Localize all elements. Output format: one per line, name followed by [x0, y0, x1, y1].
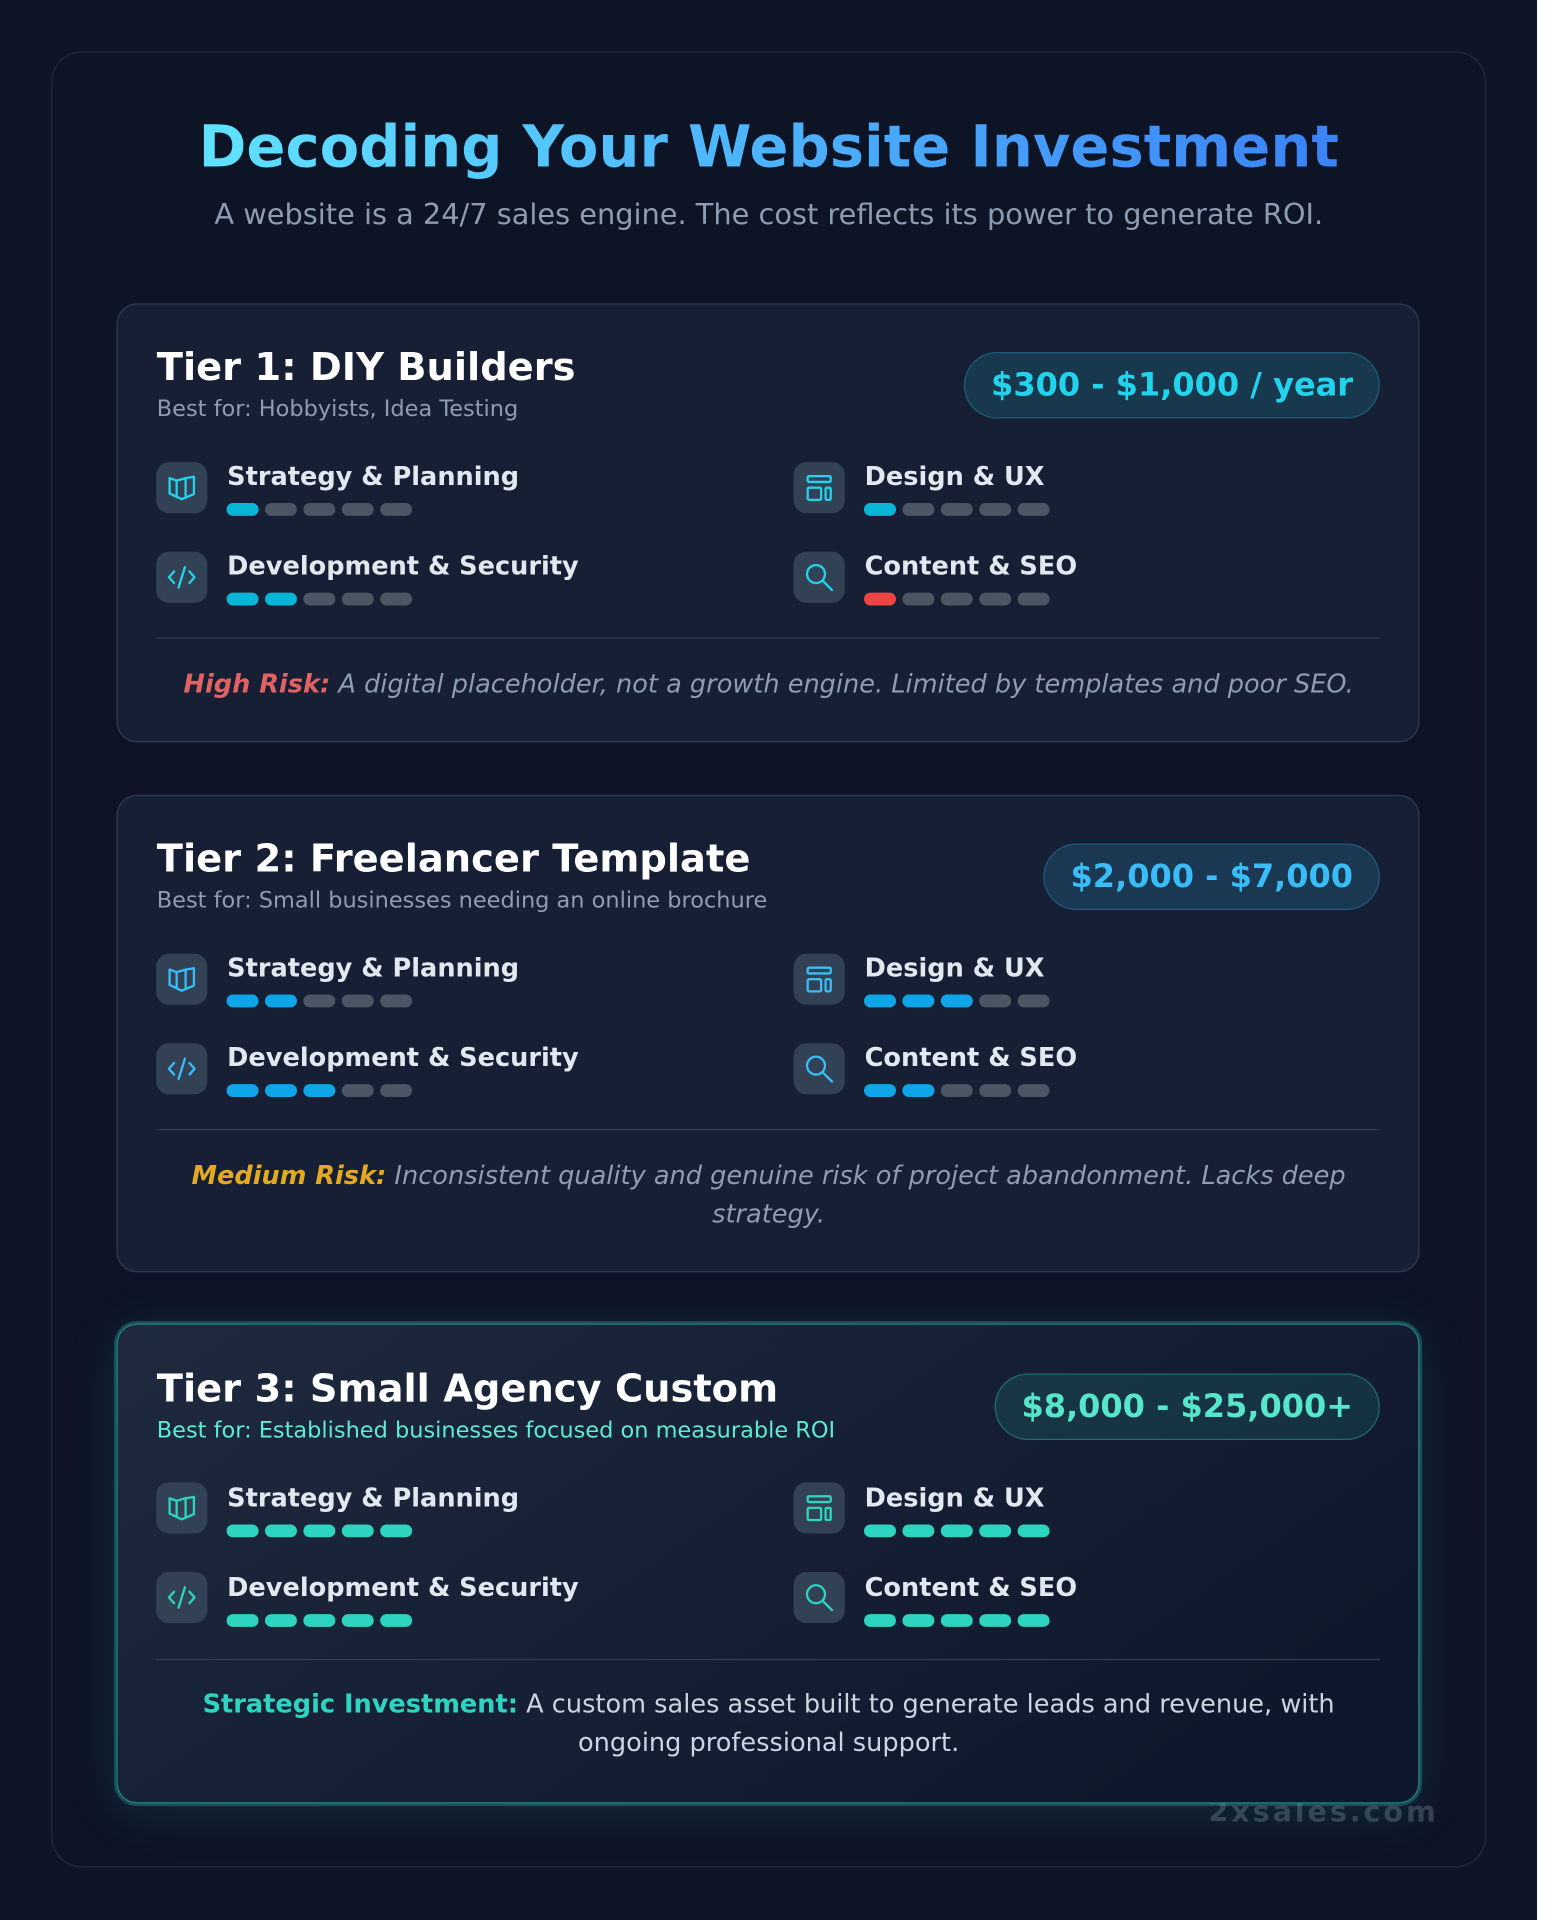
label: Design & UX — [865, 953, 1044, 984]
tier 3 price badge: $8,000 - $25,000+ — [1021, 1387, 1353, 1424]
tier 2 development and security — [156, 1042, 579, 1097]
tier 3 heading: Tier 3: Small Agency Custom — [157, 1367, 778, 1411]
panel: tier 1 DIY builders — [117, 303, 1420, 742]
tier 3 development and security — [156, 1572, 579, 1627]
tier 2 risk note: Medium Risk: Inconsistent quality and genuine risk of project abandonment. Lacks deep strategy. — [192, 1159, 1346, 1229]
icon: layout — [794, 953, 845, 1004]
panel: tier 3 small agency custom — [117, 1324, 1420, 1804]
tier 1 best for: Best for: Hobbyists, Idea Testing — [157, 397, 518, 423]
label: Development & Security — [227, 1572, 579, 1603]
tier 1 price badge — [964, 352, 1380, 418]
icon: code — [157, 551, 208, 602]
tier 1 content and SEO — [794, 551, 1077, 606]
rating bars: 1 of 5 — [864, 503, 1050, 516]
label: Development & Security — [227, 551, 579, 582]
panel: tier 2 freelancer template — [117, 794, 1420, 1273]
tier 2 strategy and planning — [156, 953, 519, 1008]
icon: map — [157, 953, 208, 1004]
tier 3 strategy and planning — [156, 1482, 519, 1538]
tier 3 investment note: Strategic Investment: A custom sales asset built to generate leads and revenue, with ongoing professional support. — [203, 1689, 1335, 1758]
tier 3 price badge — [995, 1373, 1380, 1439]
tier 1 strategy and planning — [156, 461, 519, 516]
rating bars: 1 of 5, red — [864, 592, 1050, 606]
label: Design & UX — [865, 461, 1044, 492]
tier 1 design and UX — [794, 461, 1050, 516]
subtitle: A website is a 24/7 sales engine. The cost reflects its power to generate ROI. — [214, 198, 1323, 231]
icon: code — [157, 1043, 208, 1094]
label: Design & UX — [865, 1482, 1044, 1513]
rating bars: 5 of 5 — [226, 1614, 412, 1627]
title: Decoding Your Website Investment — [199, 112, 1339, 180]
rating bars: 2 of 5 — [864, 1084, 1050, 1097]
rating bars: 5 of 5 — [864, 1524, 1050, 1538]
tier 1 heading: Tier 1: DIY Builders — [157, 346, 576, 390]
tier 2 content and SEO — [794, 1042, 1077, 1097]
tier 3 design and UX — [794, 1482, 1050, 1538]
tier 2 price badge — [1044, 843, 1380, 910]
icon: search — [794, 1043, 845, 1094]
rating bars: 5 of 5 — [226, 1524, 412, 1538]
tier 2 heading: Tier 2: Freelancer Template — [157, 837, 750, 882]
icon: layout — [794, 462, 845, 513]
rating bars: 1 of 5 — [226, 503, 412, 516]
rating bars: 3 of 5 — [226, 1084, 412, 1097]
tier 2 best for: Best for: Small businesses needing an online brochure — [157, 889, 767, 914]
watermark: 2xsales.com — [1208, 1795, 1439, 1829]
label: Development & Security — [227, 1042, 579, 1073]
rating bars: 2 of 5 — [226, 994, 412, 1008]
tier 2 design and UX — [794, 953, 1050, 1008]
tier 1 risk note: High Risk: A digital placeholder, not a growth engine. Limited by templates and poor SEO. — [184, 668, 1354, 699]
rating bars: 2 of 5 — [226, 592, 412, 606]
label: Content & SEO — [865, 551, 1077, 582]
tier 1 price badge: $300 - $1,000 / year — [991, 366, 1353, 403]
label: Content & SEO — [865, 1042, 1077, 1073]
tier 3 best for: Best for: Established businesses focused on measurable ROI — [157, 1418, 835, 1444]
rating bars: 5 of 5 — [864, 1614, 1050, 1627]
label: Strategy & Planning — [227, 953, 519, 984]
icon: map — [157, 462, 208, 513]
rating bars: 3 of 5 — [864, 994, 1050, 1008]
tier 3 content and SEO — [794, 1572, 1077, 1627]
tier 2 price badge: $2,000 - $7,000 — [1071, 857, 1353, 895]
icon: search — [794, 551, 845, 602]
icon: code — [157, 1572, 208, 1624]
label: Content & SEO — [865, 1572, 1077, 1603]
icon: search — [794, 1572, 845, 1624]
label: Strategy & Planning — [227, 461, 519, 492]
label: Strategy & Planning — [227, 1482, 519, 1513]
tier 1 development and security — [156, 551, 579, 606]
icon: layout — [794, 1483, 845, 1534]
icon: map — [157, 1483, 208, 1534]
